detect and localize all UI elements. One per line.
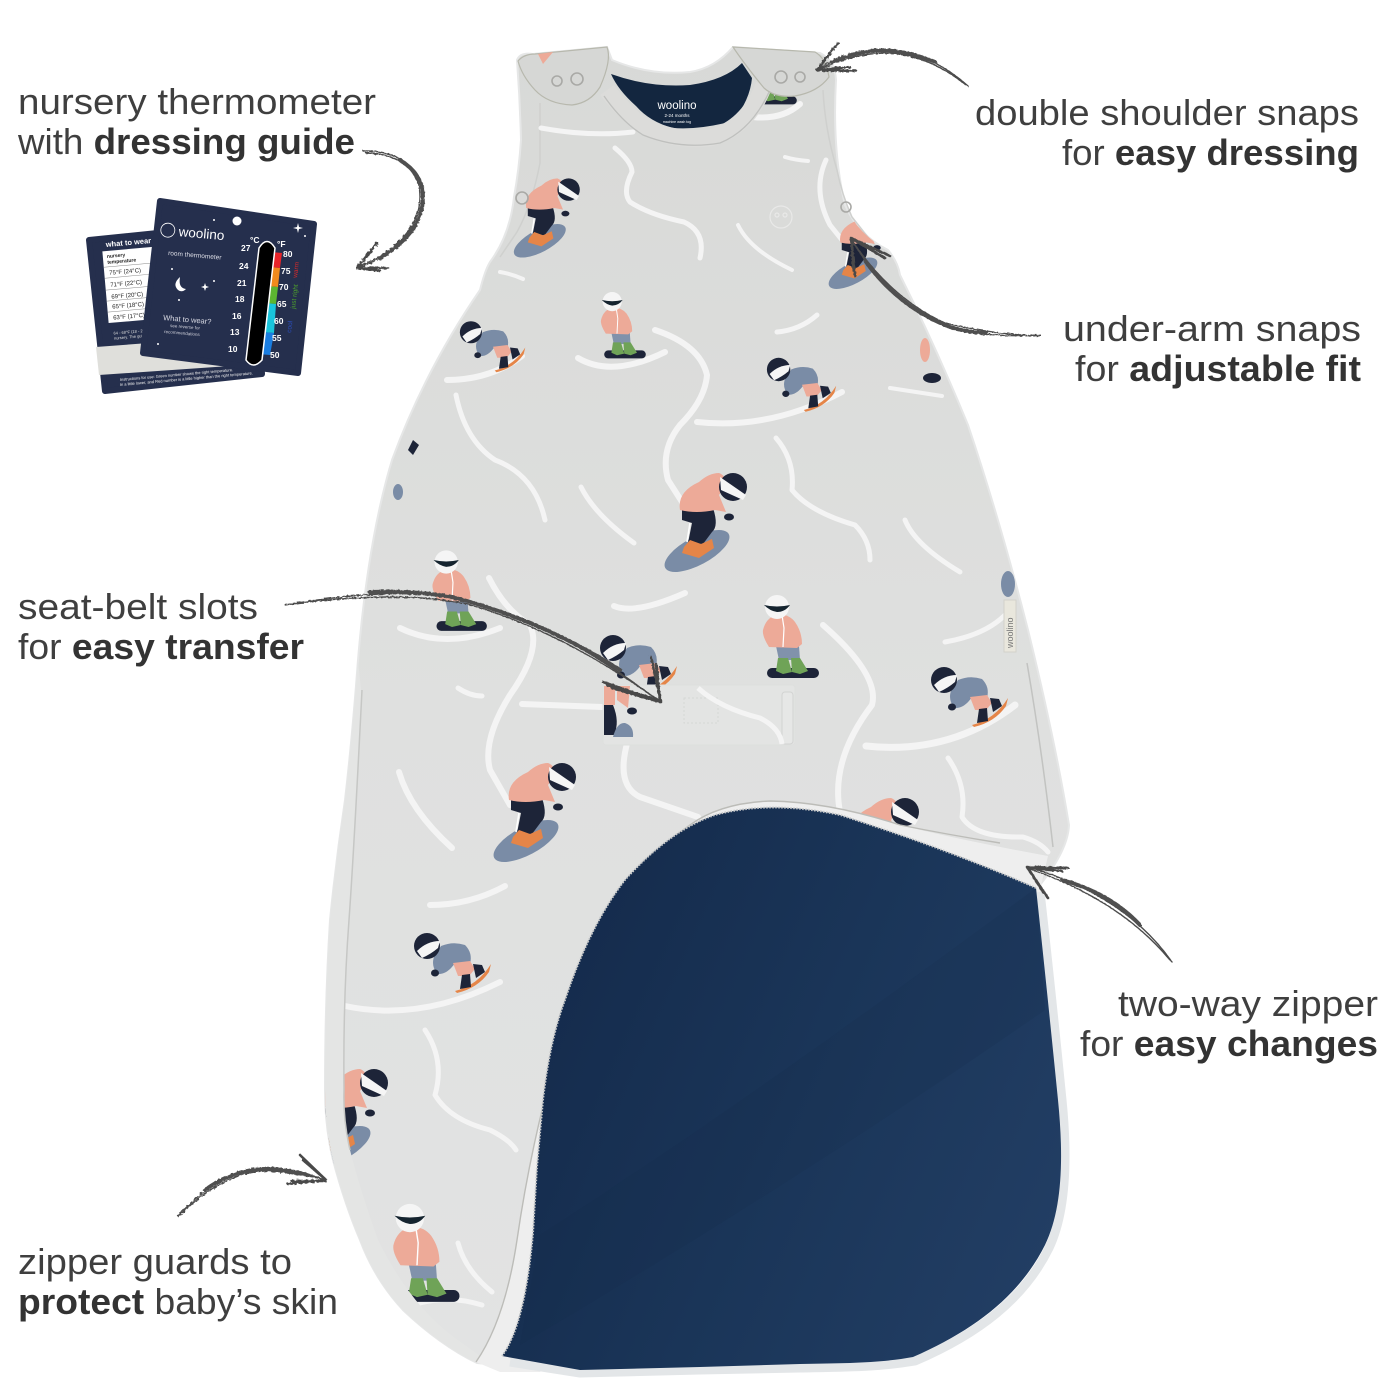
caption: two-way zipper: for easy changes xyxy=(1080,1023,1378,1064)
snowboarder figures print xyxy=(300,38,1015,1302)
right seam line xyxy=(1027,663,1053,847)
caption: zipper guards: protect baby’s skin xyxy=(18,1281,338,1322)
neck label text: machine wash tog xyxy=(663,120,691,124)
arm-hole binding xyxy=(500,90,882,257)
snowboarder: peeking above zipper xyxy=(861,798,919,826)
front card: thermometer: recommendations xyxy=(164,329,201,337)
celsius scale: 10 xyxy=(228,344,238,354)
caption: seat-belt slots: for easy transfer xyxy=(18,626,304,667)
caption: zipper guards xyxy=(18,1241,338,1322)
under-arm snap left xyxy=(516,192,528,204)
neck label text: 2-24 months xyxy=(664,113,690,118)
owl logo mark xyxy=(770,206,792,228)
caption: double shoulder snaps xyxy=(975,92,1359,173)
temperature table: 75°F (24°C) xyxy=(109,268,141,277)
guide heading: what to wear xyxy=(104,236,152,249)
snow trails print xyxy=(345,104,1048,1305)
caption: zipper guards: zipper guards to xyxy=(18,1241,292,1282)
sleep bag illustration xyxy=(300,38,1069,1373)
back card: dressing guide xyxy=(89,223,262,391)
neck label text xyxy=(656,100,696,124)
caption: double shoulder snaps: double shoulder snaps xyxy=(975,92,1359,133)
what to wear prompt: What to wear? xyxy=(163,313,212,326)
bag body: grey fabric xyxy=(325,47,1069,1365)
flap edge line xyxy=(476,801,1000,1362)
side care tag xyxy=(1004,600,1016,652)
bent rider: seat-belt xyxy=(600,635,677,684)
collar rim xyxy=(607,85,764,139)
celsius scale xyxy=(228,235,260,354)
snowboarder: shoulder left xyxy=(514,178,580,258)
caption: under-arm snaps xyxy=(1063,308,1361,389)
caption: nursery thermometer xyxy=(17,81,376,162)
fahrenheit scale: 80 xyxy=(283,249,293,259)
right shoulder flap with snaps xyxy=(733,47,829,96)
front card: thermometer: see reverse for xyxy=(170,323,201,331)
caption: under-arm snaps: for adjustable fit xyxy=(1075,348,1361,389)
colour temperature scale xyxy=(258,252,282,355)
vertical range labels: cool xyxy=(286,320,295,333)
thermometer cards xyxy=(89,200,314,391)
fahrenheit scale: 75 xyxy=(281,266,291,276)
fahrenheit scale: 70 xyxy=(279,282,289,292)
standing rider: top shoulder xyxy=(764,93,797,104)
standing rider: upper xyxy=(601,292,646,358)
caption: nursery thermometer: nursery thermometer xyxy=(18,81,376,122)
left seam line xyxy=(344,690,362,1150)
celsius scale: 16 xyxy=(232,311,242,321)
arrow: seat-belt slots xyxy=(285,592,661,702)
temperature table xyxy=(102,247,163,323)
fahrenheit scale: 55 xyxy=(272,333,282,343)
zipper teeth xyxy=(502,808,1036,1356)
moon and stars xyxy=(157,219,306,345)
front card: thermometer xyxy=(143,200,314,374)
left side binding band xyxy=(325,660,490,1363)
bent rider: centre xyxy=(767,358,836,412)
snowboarder: under-arm right xyxy=(828,222,881,289)
fahrenheit scale: 50 xyxy=(270,350,280,360)
bent rider: upper-left xyxy=(460,321,525,372)
standing rider: bottom xyxy=(393,1204,459,1302)
temperature table: nursery xyxy=(107,252,126,260)
side care tag: woolino xyxy=(1005,617,1015,649)
neck opening navy xyxy=(611,63,752,128)
celsius scale: 21 xyxy=(237,278,247,288)
neck label text: woolino xyxy=(656,100,696,112)
caption: seat-belt slots: seat-belt slots xyxy=(18,586,258,627)
caption: two-way zipper: two-way zipper xyxy=(1118,983,1378,1024)
celsius scale: 18 xyxy=(235,294,245,304)
caption: two-way zipper xyxy=(1080,983,1378,1064)
arrow: shoulder snaps xyxy=(817,43,968,86)
fahrenheit scale: 60 xyxy=(274,316,284,326)
standing rider: left xyxy=(432,550,487,631)
logo xyxy=(160,223,225,243)
logo: woolino xyxy=(177,224,225,243)
fahrenheit scale: °F xyxy=(277,239,286,249)
back card: dressing guide: nursery. The guide xyxy=(114,333,148,341)
caption: nursery thermometer: with dressing guide xyxy=(17,121,355,162)
vertical range labels: just right xyxy=(290,284,300,310)
celsius scale: 24 xyxy=(239,261,249,271)
black liquid crystal strip xyxy=(246,242,275,365)
fahrenheit scale: 65 xyxy=(277,299,287,309)
left shoulder flap with snaps xyxy=(518,47,608,105)
seat-belt slot panel xyxy=(603,685,795,745)
fahrenheit scale xyxy=(270,239,293,360)
celsius scale: 13 xyxy=(230,327,240,337)
snowboarder: lower-left edge xyxy=(325,1069,388,1164)
under-arm snap right xyxy=(841,202,851,212)
navy lining xyxy=(502,808,1061,1370)
pale illustration strip xyxy=(96,335,259,375)
zipper flap band xyxy=(476,801,1048,1372)
celsius scale: 27 xyxy=(241,243,251,253)
back card: dressing guide: Check your baby xyxy=(115,343,145,351)
arrow: zipper guards xyxy=(178,1155,326,1216)
snowboarder: lower centre xyxy=(494,763,576,862)
vertical range labels: warm xyxy=(292,262,301,279)
temperature table: 63°F (17°C) xyxy=(113,313,145,322)
caption: seat-belt slots xyxy=(18,586,304,667)
usage instructions: In a little lower, and Red number is a little higher than the right temperature. xyxy=(120,370,253,387)
back card: dressing guide: for warm or cool xyxy=(115,348,144,356)
arrow: two-way zipper xyxy=(1027,867,1172,962)
subtitle: room thermometer xyxy=(168,250,223,262)
bent rider: right xyxy=(931,667,1008,727)
temperature table: 65°F (18°C) xyxy=(112,302,144,311)
standing rider: right xyxy=(763,595,819,678)
outer hem behind lining xyxy=(510,892,1065,1373)
arrow: thermometer xyxy=(357,151,423,271)
temperature table: 69°F (20°C) xyxy=(111,292,143,301)
lining fold shading xyxy=(520,888,1045,1345)
caption: double shoulder snaps: for easy dressing xyxy=(1062,132,1359,173)
usage instructions: Instructions for use: Green number shows the right temperature. xyxy=(120,367,233,382)
caption: under-arm snaps: under-arm snaps xyxy=(1063,308,1361,349)
temperature table: temperature xyxy=(107,257,137,266)
card hole xyxy=(232,216,242,226)
guide note: 64 - 68°F (18 - 20°C) is best for xyxy=(113,326,170,336)
temperature table: 71°F (22°C) xyxy=(110,280,142,289)
arrow: under-arm snaps xyxy=(851,238,1040,336)
celsius scale: °C xyxy=(250,235,260,245)
snowboarder: centre xyxy=(664,473,747,572)
bent rider: lower-left xyxy=(414,933,491,993)
partial boards at the edges xyxy=(393,338,1015,597)
vertical range labels xyxy=(286,262,301,333)
